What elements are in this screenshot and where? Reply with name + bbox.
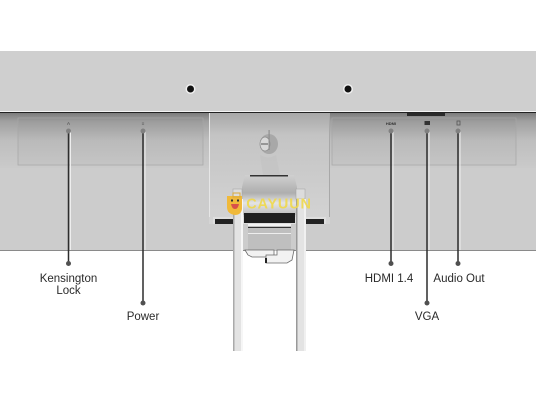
upper bezel bbox=[0, 51, 536, 111]
leader line: Audio Out bbox=[456, 128, 460, 266]
leader line: HDMI bbox=[388, 128, 394, 266]
port icon: audio bbox=[457, 121, 460, 125]
leader line: Kensington Lock bbox=[66, 128, 71, 266]
stand neck plate bbox=[209, 113, 330, 224]
monitor rear bbox=[0, 51, 536, 251]
port icon: HDMI: HDMI bbox=[386, 121, 396, 126]
watermark text: CAYUUN bbox=[246, 196, 312, 212]
stand hinge bbox=[233, 175, 305, 251]
recessed port panel left bbox=[18, 118, 203, 165]
stand cable clasp bbox=[245, 250, 294, 263]
label: Audio Out: Audio Out bbox=[433, 273, 485, 285]
mounting hole left bbox=[186, 84, 196, 94]
left stand leg bbox=[233, 199, 243, 351]
port icon: lock: A bbox=[67, 121, 70, 126]
leader line: VGA bbox=[424, 128, 430, 306]
right stand leg bbox=[296, 199, 306, 351]
watermark bbox=[227, 193, 312, 215]
lower housing bbox=[0, 113, 536, 250]
port icon: VGA bbox=[424, 121, 430, 125]
icon: watermark bag bbox=[227, 193, 242, 215]
leader line: Power bbox=[140, 128, 146, 306]
label: HDMI 1.4: HDMI 1.4 bbox=[365, 273, 414, 285]
cable clip bbox=[260, 130, 280, 175]
label: Kensington Lock: Kensington bbox=[40, 273, 97, 285]
dark notch bbox=[407, 113, 445, 116]
label: Kensington Lock: Lock bbox=[56, 285, 81, 297]
recessed port panel right bbox=[332, 118, 516, 165]
label: VGA: VGA bbox=[415, 311, 439, 323]
stand slots bbox=[213, 217, 326, 224]
label: Power: Power bbox=[127, 311, 159, 323]
mounting hole right bbox=[343, 84, 353, 94]
port icon: power: ≡ bbox=[142, 121, 145, 126]
